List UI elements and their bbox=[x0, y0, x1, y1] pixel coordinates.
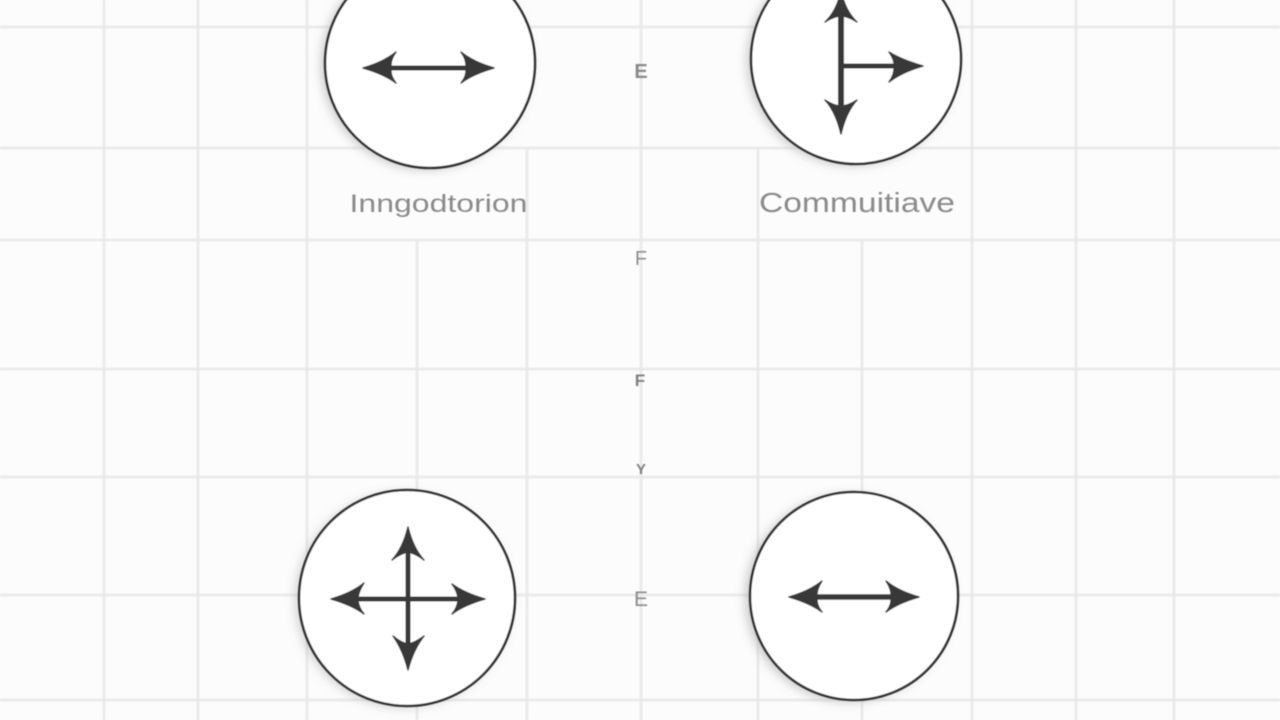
circle: bottom-right horizontal arrows bbox=[745, 492, 958, 702]
icon: double-headed horizontal arrow bbox=[363, 52, 494, 83]
circle: top-left horizontal arrows bbox=[321, 0, 535, 170]
circle: top-right branching arrows bbox=[747, 0, 961, 166]
label: Inngodtorion: Inngodtorion bbox=[350, 190, 528, 218]
label: axis letter F lower: F bbox=[635, 371, 645, 390]
icon: four-way arrow cross bbox=[331, 527, 485, 670]
icon: vertical arrow with right branch bbox=[825, 0, 923, 134]
icon: double-headed horizontal arrow bbox=[789, 581, 919, 612]
label: axis letter F upper: F bbox=[635, 248, 647, 270]
label: axis letter top: E bbox=[634, 61, 648, 83]
label: axis letter bottom: E bbox=[634, 588, 648, 611]
label: axis letter small: Y bbox=[636, 461, 646, 478]
circle: bottom-left four-way arrows bbox=[295, 490, 515, 708]
label: Commuitiave: Commuitiave bbox=[759, 187, 955, 218]
